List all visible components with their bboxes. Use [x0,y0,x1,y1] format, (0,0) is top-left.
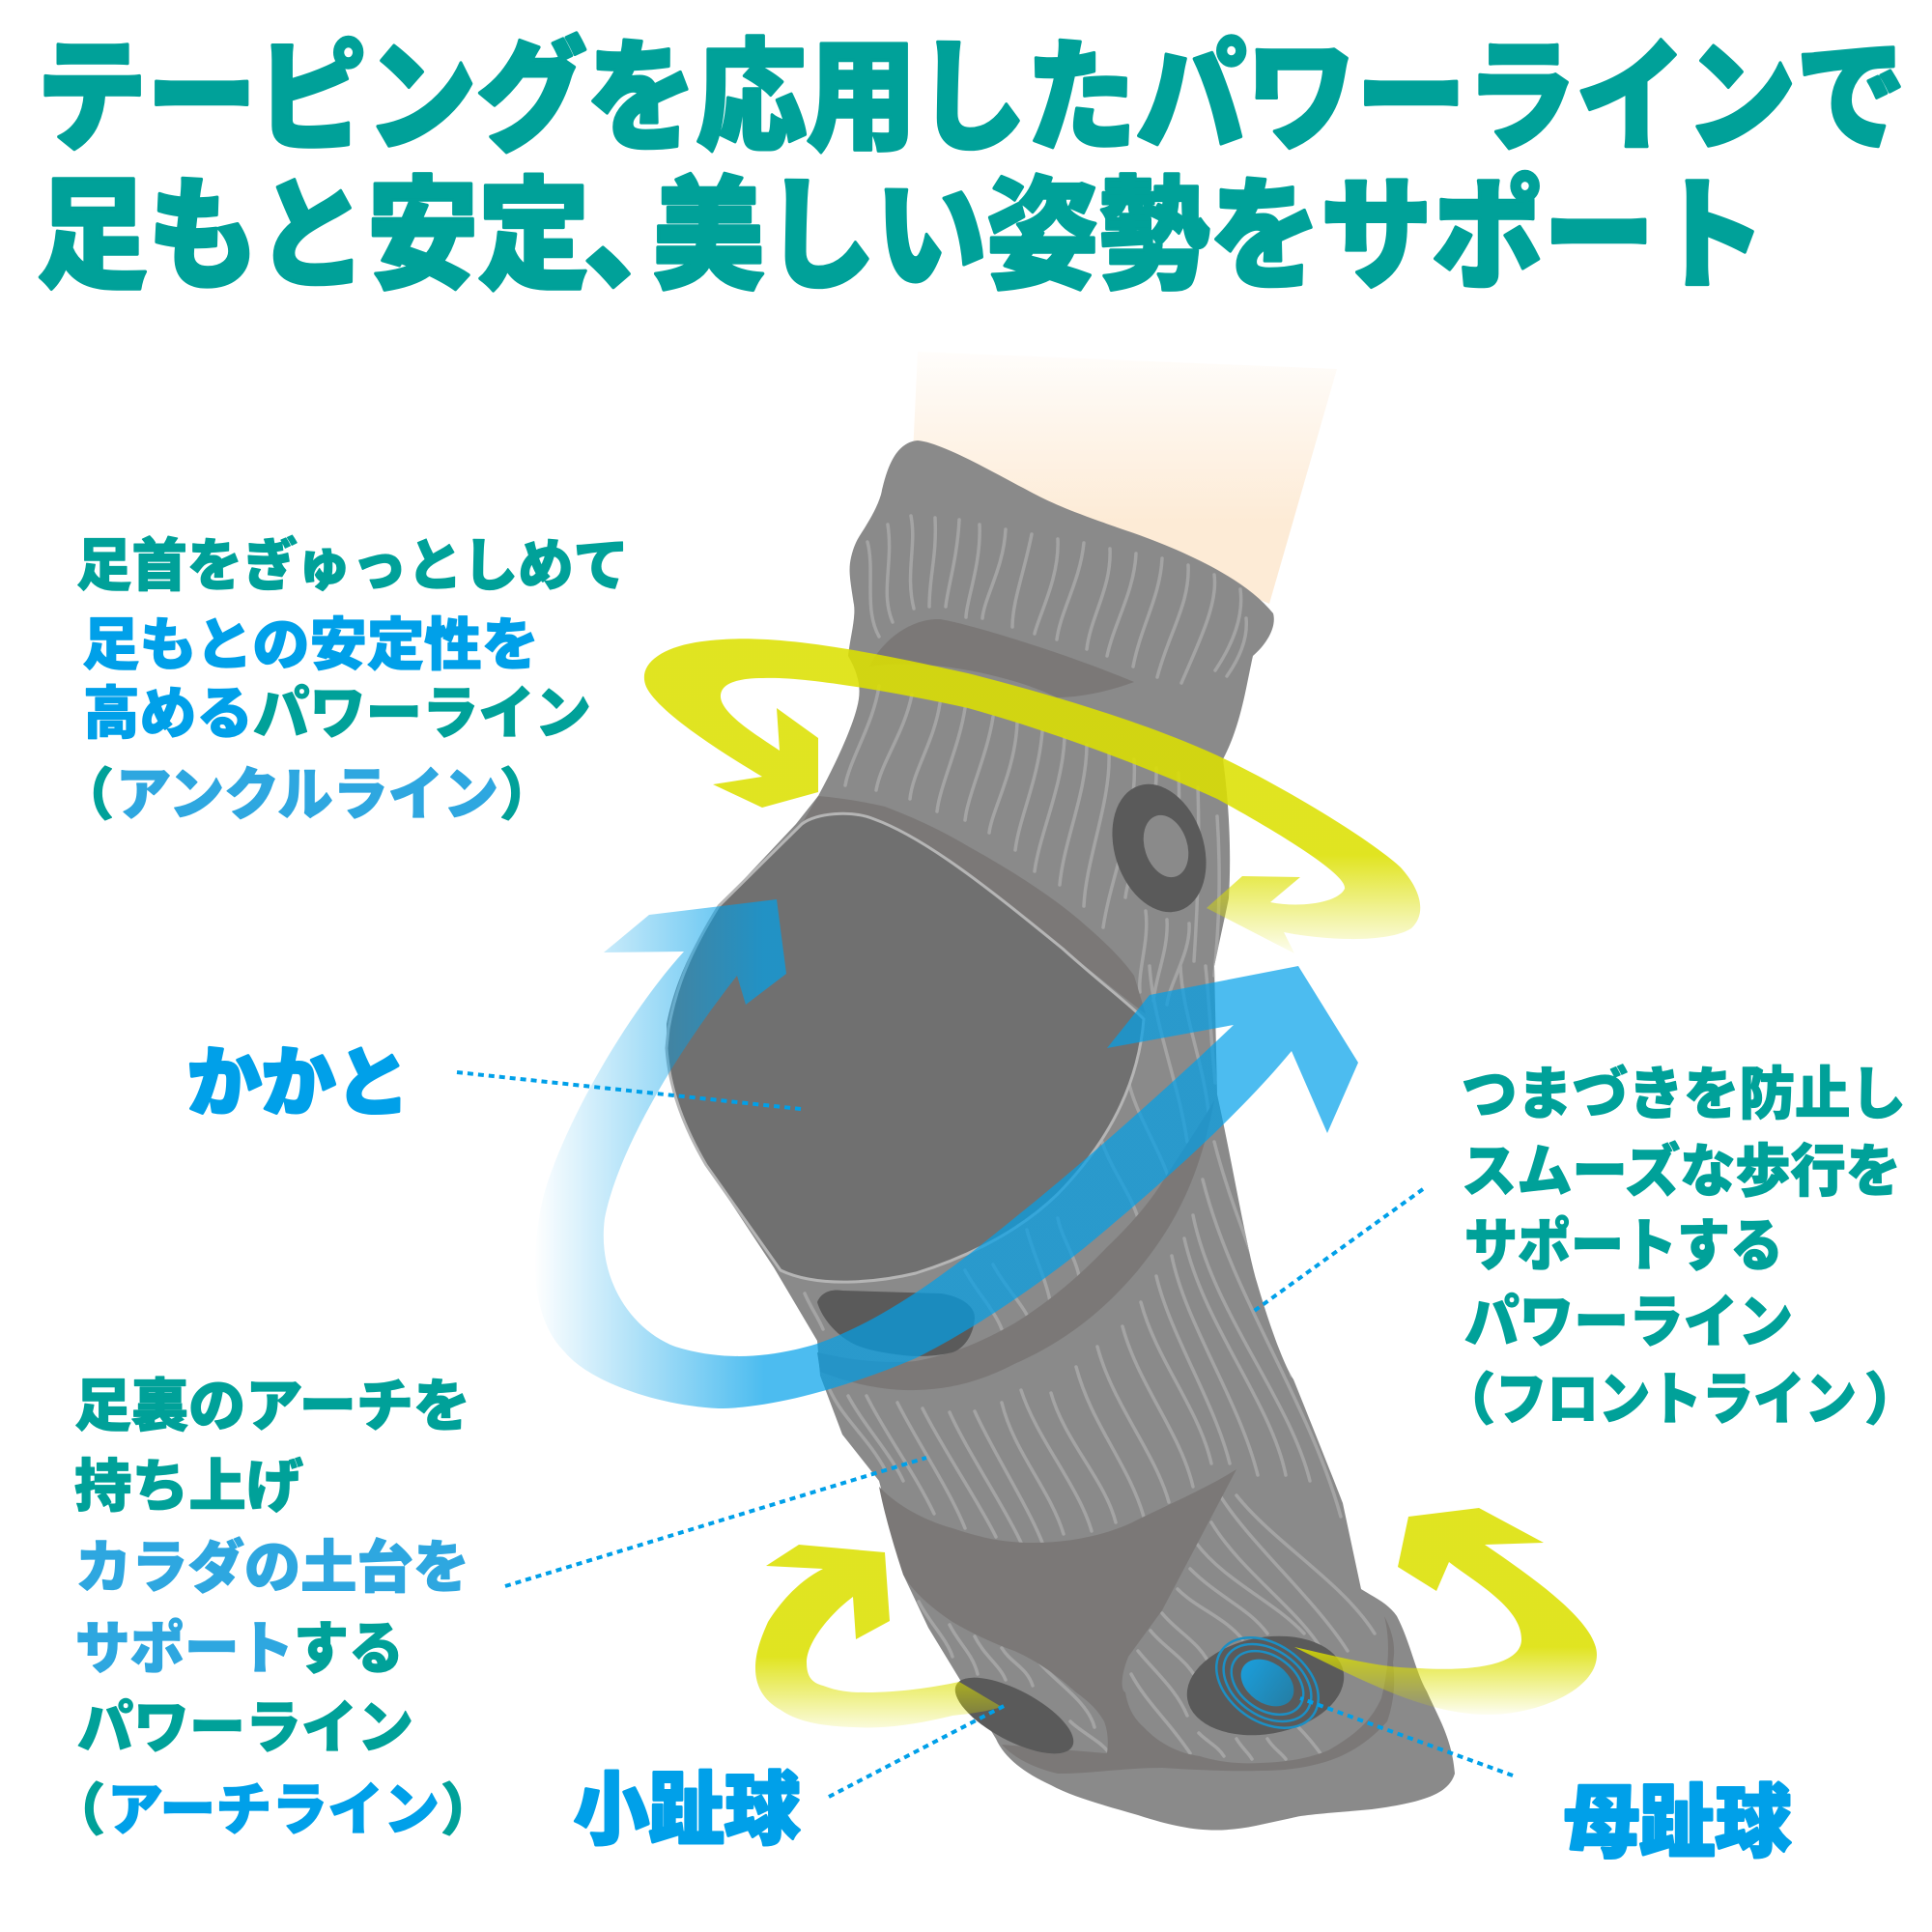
leader lines [457,1072,1513,1797]
arrow: yellow big toe [1294,1508,1597,1715]
text: front line: ） [1864,1369,1920,1432]
ankle bone pad [1096,772,1222,924]
sock body [667,440,1455,1831]
arrow: yellow little toe [755,1545,1002,1727]
text: arch line: 持ち上げ [74,1455,303,1519]
big toe pressure rings [1200,1619,1335,1747]
text: ankle line [58,534,629,827]
title [37,30,1906,304]
text: ankle line: アンクルライン [116,763,498,827]
text: front line: サポートする [1464,1214,1783,1278]
heel lower band [817,1100,1214,1390]
heel cup [667,813,1144,1282]
text: front line [1439,1063,1920,1432]
text: arch line: 足裏のアーチを [74,1375,470,1438]
text: arch line: パワーライン [77,1696,413,1760]
leg skin [913,352,1337,604]
label: little toe ball: 小趾球 [574,1767,800,1855]
text: front line: スムーズな歩行を [1462,1140,1901,1204]
arrow: yellow ankle ring [644,639,1420,953]
text: ankle line: 高める [83,682,253,746]
text: ankle line: ） [499,764,555,827]
text: ankle line: 足首をぎゅっとしめて [76,534,629,598]
text: arch line: カラダの土台を [75,1536,469,1600]
text: arch line: （ [49,1779,105,1842]
text: ankle line: 足もとの安定性を [82,613,539,677]
arrow: blue heel and front line [535,899,1358,1408]
text: ankle line: パワーライン [253,682,591,746]
label: big toe ball: 母趾球 [1564,1779,1791,1867]
text: ankle line: （ [58,764,114,827]
little toe ball pad [945,1662,1084,1769]
text: front line: つまづきを防止し [1462,1063,1906,1126]
text: arch line [49,1375,497,1842]
arch band and toe crescent [879,1469,1394,1774]
text: arch line: する [294,1617,404,1681]
title: 足もと安定 [37,168,589,304]
text: front line: フロントライン [1495,1368,1857,1432]
title: 、 [583,168,705,304]
big toe ball pad [1179,1625,1351,1747]
sock illustration [667,440,1455,1831]
text: front line: パワーライン [1464,1291,1793,1354]
title: 美しい姿勢をサポート [653,168,1766,304]
text: arch line: ） [440,1779,497,1842]
under-heel dark patch [817,1291,975,1356]
text: arch line: アーチライン [107,1778,440,1842]
cuff shadow wedge [869,619,1134,697]
heel upper band [802,796,1146,1014]
label: heel: かかと [187,1040,410,1125]
sock ribs [805,516,1375,1759]
text: arch line: サポート [75,1617,294,1681]
text: front line: （ [1439,1369,1495,1432]
